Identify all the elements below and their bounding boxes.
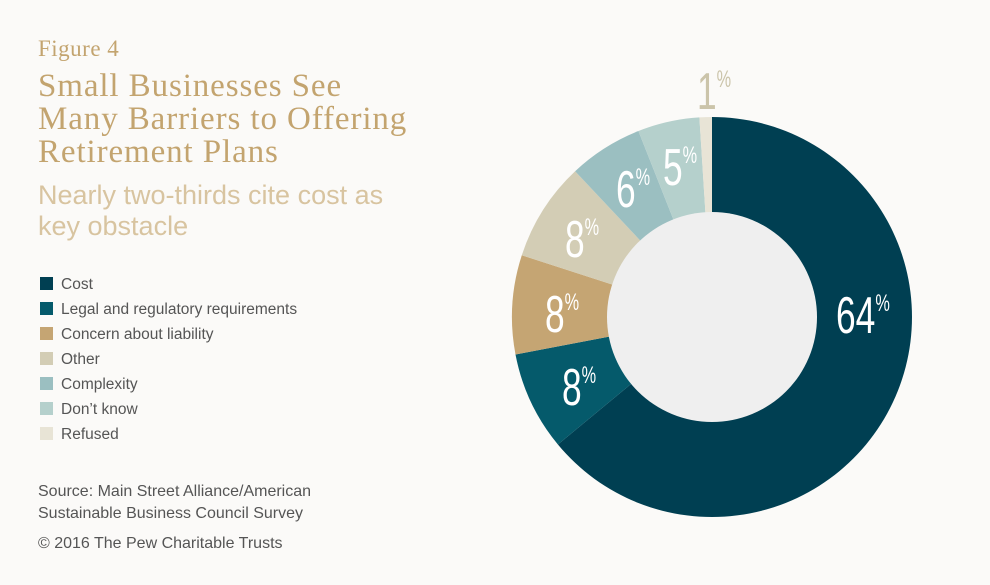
legend: Don’t know — [61, 401, 138, 418]
donut chart: 8 — [562, 359, 582, 417]
donut chart: 1 — [697, 63, 717, 121]
title — [38, 68, 407, 170]
title: Small Businesses See — [38, 68, 342, 104]
source: Sustainable Business Council Survey — [38, 505, 303, 522]
donut chart: % — [585, 214, 599, 241]
source — [38, 483, 311, 522]
donut chart: % — [717, 66, 731, 93]
donut chart: 5 — [663, 139, 683, 197]
donut chart: % — [683, 142, 697, 169]
copyright: © 2016 The Pew Charitable Trusts — [38, 535, 283, 552]
donut chart: % — [565, 289, 579, 316]
donut chart: 6 — [616, 161, 636, 219]
subtitle: Nearly two-thirds cite cost as — [38, 180, 383, 210]
title: Retirement Plans — [38, 134, 279, 170]
figure label: Figure 4 — [38, 36, 119, 61]
legend: Cost — [61, 276, 93, 293]
donut chart: 8 — [565, 211, 585, 269]
subtitle: key obstacle — [38, 211, 188, 241]
donut chart: % — [582, 362, 596, 389]
title: Many Barriers to Offering — [38, 101, 407, 137]
donut chart: % — [636, 164, 650, 191]
legend: Concern about liability — [61, 326, 214, 343]
legend — [40, 276, 297, 443]
legend: Other — [61, 351, 100, 368]
legend: Legal and regulatory requirements — [61, 301, 297, 318]
subtitle — [38, 180, 383, 241]
donut chart: 8 — [545, 286, 565, 344]
legend: Complexity — [61, 376, 138, 393]
donut chart: % — [875, 290, 890, 317]
source: Source: Main Street Alliance/American — [38, 483, 311, 500]
legend: Refused — [61, 426, 119, 443]
donut chart: 64 — [836, 287, 875, 345]
